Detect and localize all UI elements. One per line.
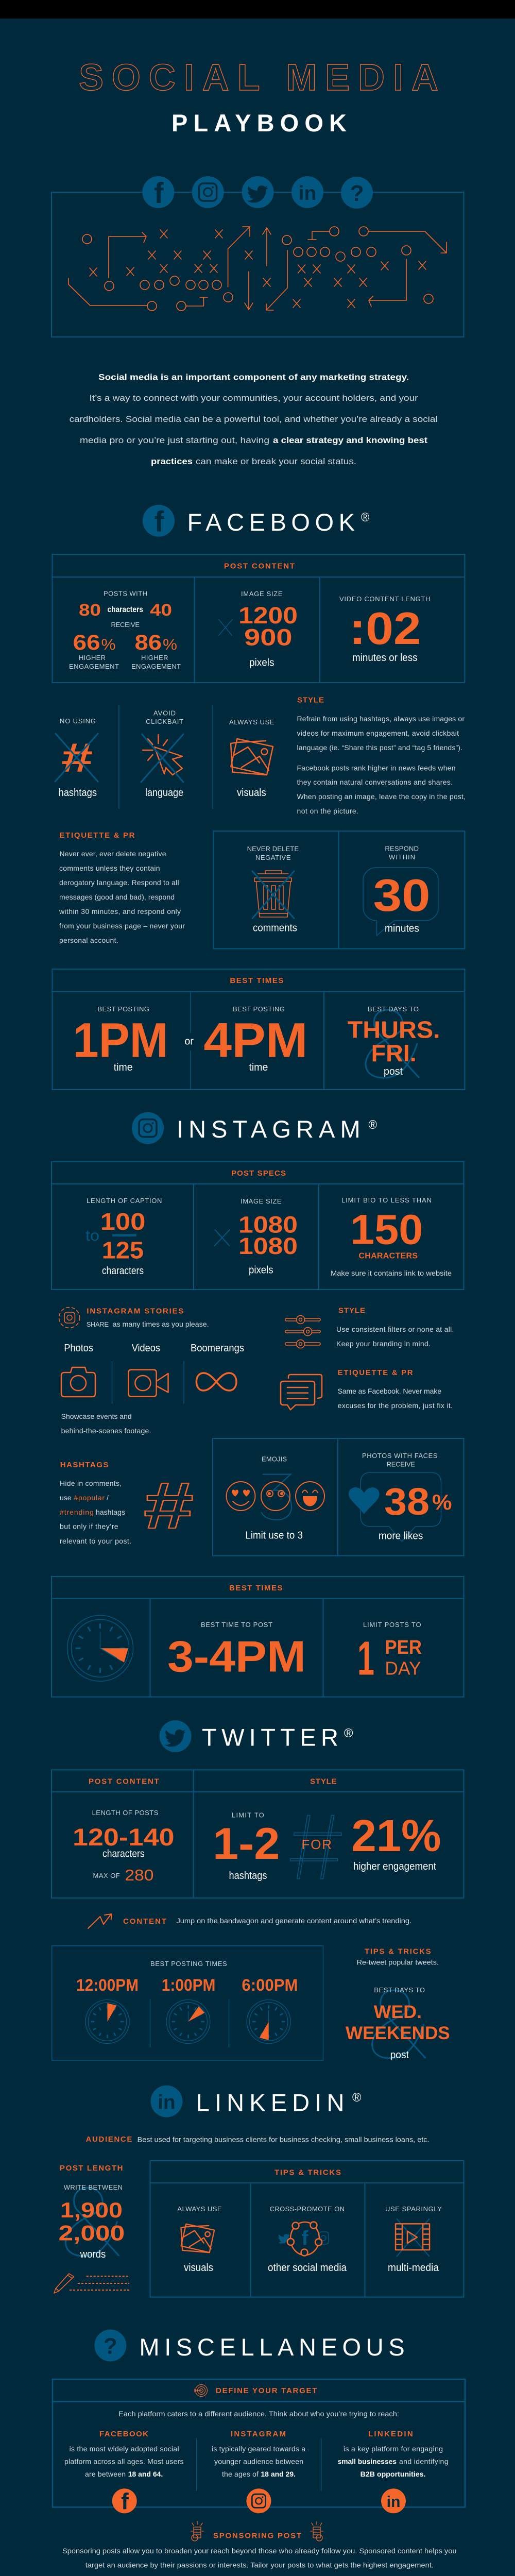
icon: linkedin: in: [299, 182, 316, 205]
hashtag limit: FOR: [302, 1837, 332, 1852]
diagram: football play: [68, 227, 447, 311]
column: facebook: platform across all ages. Most users: [64, 2458, 183, 2466]
panel: etiquette and pr: within 30 minutes, and respond only: [59, 907, 181, 916]
stats: characters: 66: [73, 630, 100, 654]
always use visuals: ALWAYS USE: [229, 718, 274, 726]
no hashtags: [55, 717, 98, 799]
heading: post content: POST CONTENT: [89, 1777, 159, 1786]
panel: instagram style: [285, 1307, 454, 1348]
time: 1pm: time: [114, 1062, 133, 1073]
image size: IMAGE SIZE: [241, 1197, 282, 1205]
photos with faces: [349, 1452, 452, 1541]
panel: instagram stories: as many times as you please.: [113, 1320, 209, 1328]
stats: image size: 1200: [238, 602, 298, 629]
no hashtags: NO USING: [60, 717, 96, 725]
panel: post content: [52, 554, 465, 683]
time: 1pm: 1PM: [73, 1013, 168, 1067]
time: 4pm: time: [249, 1062, 268, 1073]
heading: linkedin: LINKEDIN: [196, 2089, 344, 2116]
limit posts: PER: [385, 1637, 422, 1658]
icon: twitter: [242, 176, 274, 208]
icon: stories: [59, 1308, 80, 1328]
stats: video length: minutes or less: [352, 652, 418, 664]
panel: twitter tips and tricks: WED.: [374, 2002, 422, 2022]
limit posts: 1: [357, 1632, 374, 1685]
heading: post content: POST CONTENT: [224, 562, 295, 571]
panel: twitter posting times: 12:00PM: [76, 1976, 139, 1994]
stats: characters: [69, 589, 181, 670]
panel: hashtags: [60, 1461, 194, 1545]
stats: characters: RECEIVE: [111, 621, 140, 629]
panel: instagram best times: [52, 1577, 464, 1697]
heading: linkedin: in: [158, 2092, 176, 2114]
best time to post: BEST TIME TO POST: [201, 1621, 272, 1629]
panel: define your target: Each platform caters to a different audience. Think about who you’re trying to reach:: [118, 2410, 399, 2418]
stats: characters: 86: [135, 630, 162, 654]
panel: instagram style: Use consistent filters or none at all.: [336, 1325, 454, 1333]
icon: coins left: [191, 2521, 203, 2541]
emojis: Limit use to 3: [245, 1530, 303, 1541]
stats: image size: pixels: [249, 657, 274, 669]
panel: instagram stories: behind-the-scenes footage.: [61, 1427, 151, 1435]
column: facebook: are between: [85, 2470, 126, 2478]
time: 4pm: 4PM: [203, 1013, 308, 1067]
title: SOCIAL MEDIA: [79, 57, 438, 98]
icon: outlined hashtag: #: [144, 1469, 194, 1543]
panel: instagram style: Keep your branding in mind.: [336, 1340, 431, 1348]
heading: twitter: [160, 1720, 353, 1752]
icon: linkedin: [291, 176, 323, 208]
time: 4pm: BEST POSTING: [233, 1005, 285, 1013]
column: linkedin: LINKEDIN: [368, 2430, 413, 2438]
photos with faces: 38: [384, 1480, 430, 1523]
panel: facebook style: Refrain from using hashtags, always use images or: [297, 715, 465, 723]
panel: hashtags: hashtags: [96, 1508, 125, 1516]
icon: facebook: f: [154, 177, 164, 210]
best days: BEST DAYS TO: [368, 1005, 419, 1013]
emojis: EMOJIS: [262, 1455, 287, 1463]
panel: play diagram: [52, 176, 464, 337]
panel: sponsoring post: target an audience by their passions or interests. Tailor your posts to what gets the highest engagement.: [85, 2561, 434, 2569]
hashtag limit: 21%: [351, 1811, 441, 1861]
intro text: It’s a way to connect with your communities, your account holders, and your: [90, 393, 418, 403]
panel: etiquette and pr: derogatory language. Respond to all: [59, 878, 179, 887]
caption length: 125: [102, 1236, 144, 1263]
panel: post length: 1,900: [60, 2198, 123, 2222]
hashtag limit: LIMIT TO: [232, 1811, 264, 1819]
emojis: [227, 1455, 324, 1541]
panel: do and don't icons: [55, 705, 274, 809]
heading: instagram: INSTAGRAM: [177, 1115, 360, 1143]
panel: post length: [54, 2164, 129, 2293]
panel: linkedin tips and tricks: [150, 2161, 464, 2297]
bio limit: [331, 1196, 452, 1277]
multi-media: multi-media: [388, 2262, 439, 2274]
image size: pixels: [249, 1264, 273, 1276]
panel: post length: words: [80, 2249, 106, 2260]
stats: video length: :02: [349, 603, 421, 654]
post length: 120-140: [73, 1823, 175, 1851]
audience: AUDIENCE: [85, 2135, 132, 2144]
panel: facebook style: [297, 696, 466, 815]
icon: coins right: [311, 2521, 323, 2541]
post length: LENGTH OF POSTS: [92, 1809, 159, 1817]
panel: hashtags: but only if they’re: [60, 1522, 118, 1530]
icon: clock 12pm: [85, 2000, 129, 2043]
avoid clickbait: [141, 709, 183, 799]
always use visuals: [229, 718, 274, 799]
always use visuals: [177, 2205, 222, 2274]
post length: 280: [125, 1866, 153, 1884]
column: facebook: is the most widely adopted social: [70, 2445, 179, 2453]
limit posts: LIMIT POSTS TO: [363, 1621, 421, 1629]
panel: twitter posting times: BEST POSTING TIMES: [150, 1960, 227, 1968]
photos with faces: PHOTOS WITH FACES: [362, 1452, 438, 1460]
icon: target: [195, 2384, 207, 2397]
panel: instagram etiquette: [281, 1368, 453, 1410]
panel: post length: POST LENGTH: [60, 2164, 123, 2173]
panel: facebook best times: [52, 969, 465, 1090]
column: facebook: f: [121, 2489, 129, 2515]
bio limit: LIMIT BIO TO LESS THAN: [341, 1196, 432, 1204]
time: 1pm: BEST POSTING: [97, 1005, 149, 1013]
stats: characters: POSTS WITH: [104, 589, 147, 597]
panel: twitter tips and tricks: BEST DAYS TO: [374, 1986, 425, 1994]
panel: twitter tips and tricks: [346, 1947, 450, 2061]
caption length: LENGTH OF CAPTION: [87, 1197, 162, 1205]
panel: sponsoring post: [62, 2521, 456, 2569]
heading: facebook: FACEBOOK: [187, 509, 355, 536]
column: facebook: [64, 2430, 183, 2515]
icon: instagram: [192, 176, 224, 208]
panel: etiquette and pr: comments unless they contain: [59, 864, 160, 872]
panel: etiquette and pr: personal account.: [59, 936, 118, 944]
photos with faces: %: [432, 1490, 452, 1514]
panel: hashtags: #popular: [74, 1494, 105, 1502]
caption length: [85, 1197, 162, 1277]
respond within 30 minutes: [363, 844, 438, 936]
intro text: practices: [151, 456, 193, 466]
column: linkedin: in: [387, 2494, 400, 2511]
intro text: a clear strategy and knowing best: [273, 435, 427, 445]
icon: video camera: [128, 1370, 168, 1397]
panel: post length: 2,000: [59, 2221, 125, 2245]
panel: instagram stories: Boomerangs: [191, 1343, 244, 1354]
panel: facebook style: videos for maximum engagement, avoid clickbait: [297, 729, 459, 737]
limit posts: [357, 1621, 422, 1685]
heading: miscellaneous: MISCELLANEOUS: [139, 2333, 405, 2361]
icon: question: [341, 177, 373, 209]
respond within 30 minutes: RESPOND: [385, 844, 419, 852]
panel: post specs: [52, 1162, 464, 1290]
bio limit: CHARACTERS: [358, 1252, 418, 1260]
photos with faces: more likes: [379, 1530, 423, 1541]
bio limit: 150: [350, 1207, 423, 1253]
best days: FRI.: [371, 1040, 417, 1066]
icon: trending arrow: [88, 1914, 112, 1928]
stats: characters: ENGAGEMENT: [69, 663, 119, 670]
heading: facebook: ®: [361, 511, 369, 524]
respond within 30 minutes: minutes: [385, 923, 419, 935]
panel: hashtags: use: [60, 1494, 72, 1502]
post length: MAX OF: [93, 1872, 120, 1879]
panel: twitter posting times: 6:00PM: [242, 1976, 298, 1994]
avoid clickbait: language: [145, 787, 183, 799]
best days: post: [384, 1066, 403, 1077]
never delete comments: [247, 845, 299, 934]
caption length: to: [85, 1227, 99, 1244]
stats: characters: ENGAGEMENT: [131, 663, 181, 670]
stats: characters: 80: [79, 601, 101, 619]
icon: infinity: [196, 1373, 236, 1391]
panel: hashtags: Hide in comments,: [60, 1479, 122, 1487]
respond within 30 minutes: WITHIN: [389, 853, 415, 861]
intro text: Social media is an important component of any marketing strategy.: [98, 372, 409, 382]
always use visuals: visuals: [184, 2262, 213, 2274]
icon: clock: [67, 1615, 133, 1681]
column: instagram: the ages of: [222, 2470, 259, 2478]
stats: characters: %: [101, 636, 115, 653]
icon: question: ?: [350, 181, 364, 206]
panel: facebook style: When posting an image, leave the copy in the post,: [297, 792, 466, 801]
stats: image size: IMAGE SIZE: [241, 590, 283, 598]
stats: characters: HIGHER: [141, 654, 168, 662]
heading: style: STYLE: [310, 1777, 337, 1786]
caption length: 100: [100, 1208, 145, 1235]
column: linkedin: and identifying: [399, 2458, 448, 2466]
panel: instagram stories: Showcase events and: [61, 1412, 132, 1420]
heading: instagram: [132, 1112, 377, 1144]
best time to post: 3-4PM: [167, 1633, 306, 1682]
best days: THURS.: [348, 1016, 440, 1043]
panel: etiquette and pr: [59, 831, 185, 944]
heading: tips and tricks: TIPS & TRICKS: [274, 2168, 341, 2177]
heading: best times: BEST TIMES: [229, 1584, 282, 1592]
heading: facebook: [143, 505, 369, 538]
no hashtags: hashtags: [59, 787, 97, 799]
heading: instagram: ®: [369, 1118, 377, 1132]
column: facebook: 18 and 64.: [128, 2470, 163, 2478]
column: linkedin: small businesses: [338, 2458, 397, 2466]
title: [79, 57, 438, 137]
always use visuals: ALWAYS USE: [177, 2205, 222, 2213]
panel: twitter tips and tricks: WEEKENDS: [346, 2023, 450, 2043]
or: or: [184, 1036, 194, 1047]
panel: instagram style: STYLE: [338, 1307, 365, 1315]
panel: hashtags: relevant to your post.: [60, 1537, 131, 1545]
cross-promote: f: [301, 2227, 308, 2249]
panel: etiquette and pr: Never ever, ever delete negative: [60, 850, 166, 858]
intro text: media pro or you’re just starting out, having: [80, 435, 269, 445]
panel: facebook style: not on the picture.: [297, 807, 358, 815]
hashtag limit: higher engagement: [353, 1861, 436, 1872]
icon: facebook: [142, 176, 174, 210]
always use visuals: visuals: [237, 787, 266, 799]
column: instagram: INSTAGRAM: [231, 2430, 286, 2438]
post length: [73, 1809, 175, 1884]
panel: twitter posting times: 1:00PM: [162, 1976, 215, 1994]
stats: image size: 900: [244, 624, 293, 650]
heading: linkedin: [150, 2086, 362, 2117]
panel: etiquette and pr: from your business page – never your: [59, 922, 185, 930]
avoid clickbait: AVOID: [153, 709, 176, 717]
image size: [214, 1197, 298, 1276]
stats: characters: %: [163, 636, 177, 653]
panel: etiquette and pr: messages (good and bad), respond: [59, 893, 175, 901]
limit posts: DAY: [385, 1658, 421, 1679]
column: instagram: younger audience between: [214, 2458, 303, 2466]
panel: instagram stories: [59, 1307, 244, 1435]
icon: messages: [281, 1375, 322, 1410]
never delete comments: NEVER DELETE: [247, 845, 299, 853]
cross-promote: other social media: [268, 2262, 347, 2274]
hashtag limit: [213, 1811, 441, 1882]
respond within 30 minutes: 30: [373, 870, 431, 921]
panel: never delete and respond within: [213, 831, 465, 948]
heading: facebook: f: [154, 505, 165, 538]
column: facebook: FACEBOOK: [99, 2430, 148, 2438]
audience: Best used for targeting business clients for business checking, small business loans, etc.: [138, 2135, 430, 2143]
heading: miscellaneous: ?: [104, 2334, 117, 2359]
icon: clock 1pm: [166, 2000, 210, 2043]
panel: etiquette and pr: ETIQUETTE & PR: [60, 831, 135, 840]
bio limit: Make sure it contains link to website: [331, 1269, 452, 1277]
panel: hashtags: /: [107, 1494, 109, 1502]
panel: instagram stories: INSTAGRAM STORIES: [87, 1307, 183, 1316]
column: linkedin: B2B opportunities.: [360, 2470, 425, 2478]
no hashtags: #: [61, 735, 93, 781]
panel: instagram stories: Photos: [64, 1343, 93, 1354]
hashtag limit: hashtags: [229, 1870, 267, 1882]
stats: characters: characters: [107, 605, 143, 614]
cross-promote: CROSS-PROMOTE ON: [270, 2205, 345, 2213]
panel: instagram etiquette: Same as Facebook. Never make: [338, 1387, 441, 1395]
heading: twitter: TWITTER: [202, 1724, 338, 1751]
panel: facebook style: they contain natural conversations and shares.: [297, 778, 453, 786]
panel: sponsoring post: SPONSORING POST: [213, 2531, 301, 2540]
stats: characters: 40: [150, 601, 172, 619]
panel: hashtags: #trending: [60, 1508, 94, 1516]
panel: instagram stories: Videos: [132, 1343, 160, 1354]
icon: pencil: [54, 2274, 74, 2293]
panel: twitter posting times: [52, 1946, 323, 2060]
panel: sponsoring post: Sponsoring posts allow you to broaden your reach beyond those who already follow you. Sponsored content helps you: [62, 2547, 456, 2555]
hashtag limit: 1-2: [213, 1819, 280, 1869]
intro text: [70, 372, 438, 466]
column: linkedin: [338, 2430, 448, 2513]
content row: [88, 1914, 411, 1928]
photos with faces: RECEIVE: [387, 1460, 415, 1468]
intro text: can make or break your social status.: [196, 456, 356, 466]
panel: post length: WRITE BETWEEN: [64, 2183, 123, 2191]
content row: Jump on the bandwagon and generate content around what’s trending.: [176, 1917, 411, 1925]
best days: [348, 1005, 440, 1078]
panel: twitter tips and tricks: post: [390, 2049, 409, 2061]
panel: define your target: [53, 2379, 465, 2515]
panel: hashtags: HASHTAGS: [60, 1461, 108, 1469]
panel: instagram etiquette: excuses for the problem, just fix it.: [338, 1401, 453, 1410]
heading: post specs: POST SPECS: [231, 1169, 286, 1178]
panel: emojis and faces: [213, 1438, 464, 1556]
post length: characters: [102, 1849, 145, 1860]
column: instagram: [212, 2430, 305, 2513]
title: PLAYBOOK: [171, 109, 347, 137]
never delete comments: NEGATIVE: [255, 854, 291, 861]
heading: twitter: ®: [344, 1726, 353, 1740]
panel: define your target: DEFINE YOUR TARGET: [216, 2386, 317, 2395]
image size: 1080: [238, 1233, 298, 1259]
panel: facebook style: STYLE: [297, 696, 324, 705]
image size: 1080: [238, 1212, 298, 1238]
avoid clickbait: CLICKBAIT: [146, 718, 183, 725]
column: instagram: is typically geared towards a: [212, 2445, 305, 2453]
stats: image size: [218, 590, 298, 669]
icon: sliders: [285, 1315, 320, 1348]
panel: facebook style: language (ie. “Share this post” and “tag 5 friends”).: [297, 743, 462, 752]
intro text: cardholders. Social media can be a powerful tool, and whether you’re already a social: [70, 414, 438, 424]
multi-media: USE SPARINGLY: [385, 2205, 442, 2213]
heading: linkedin: ®: [352, 2091, 362, 2105]
caption length: characters: [102, 1265, 144, 1277]
panel: facebook style: Facebook posts rank higher in news feeds when: [297, 764, 455, 772]
icon: clock 6pm: [247, 2000, 290, 2043]
never delete comments: comments: [253, 922, 297, 934]
stats: characters: HIGHER: [79, 654, 106, 662]
content row: CONTENT: [123, 1917, 166, 1926]
cross-promote: [268, 2205, 347, 2274]
panel: twitter tips and tricks: Re-tweet popular tweets.: [357, 1958, 439, 1967]
icon: camera: [61, 1367, 95, 1397]
panel: instagram stories: SHARE: [87, 1320, 109, 1328]
column: linkedin: is a key platform for engaging: [344, 2445, 443, 2453]
panel: twitter tips and tricks: TIPS & TRICKS: [365, 1947, 431, 1956]
column: instagram: 18 and 29.: [261, 2470, 296, 2478]
heading: best times: BEST TIMES: [230, 976, 283, 985]
stats: video length: VIDEO CONTENT LENGTH: [339, 595, 431, 603]
stats: video length: [339, 595, 431, 664]
panel: instagram etiquette: ETIQUETTE & PR: [338, 1368, 413, 1377]
panel: twitter post content and style: [52, 1770, 464, 1898]
multi-media: [385, 2205, 442, 2274]
